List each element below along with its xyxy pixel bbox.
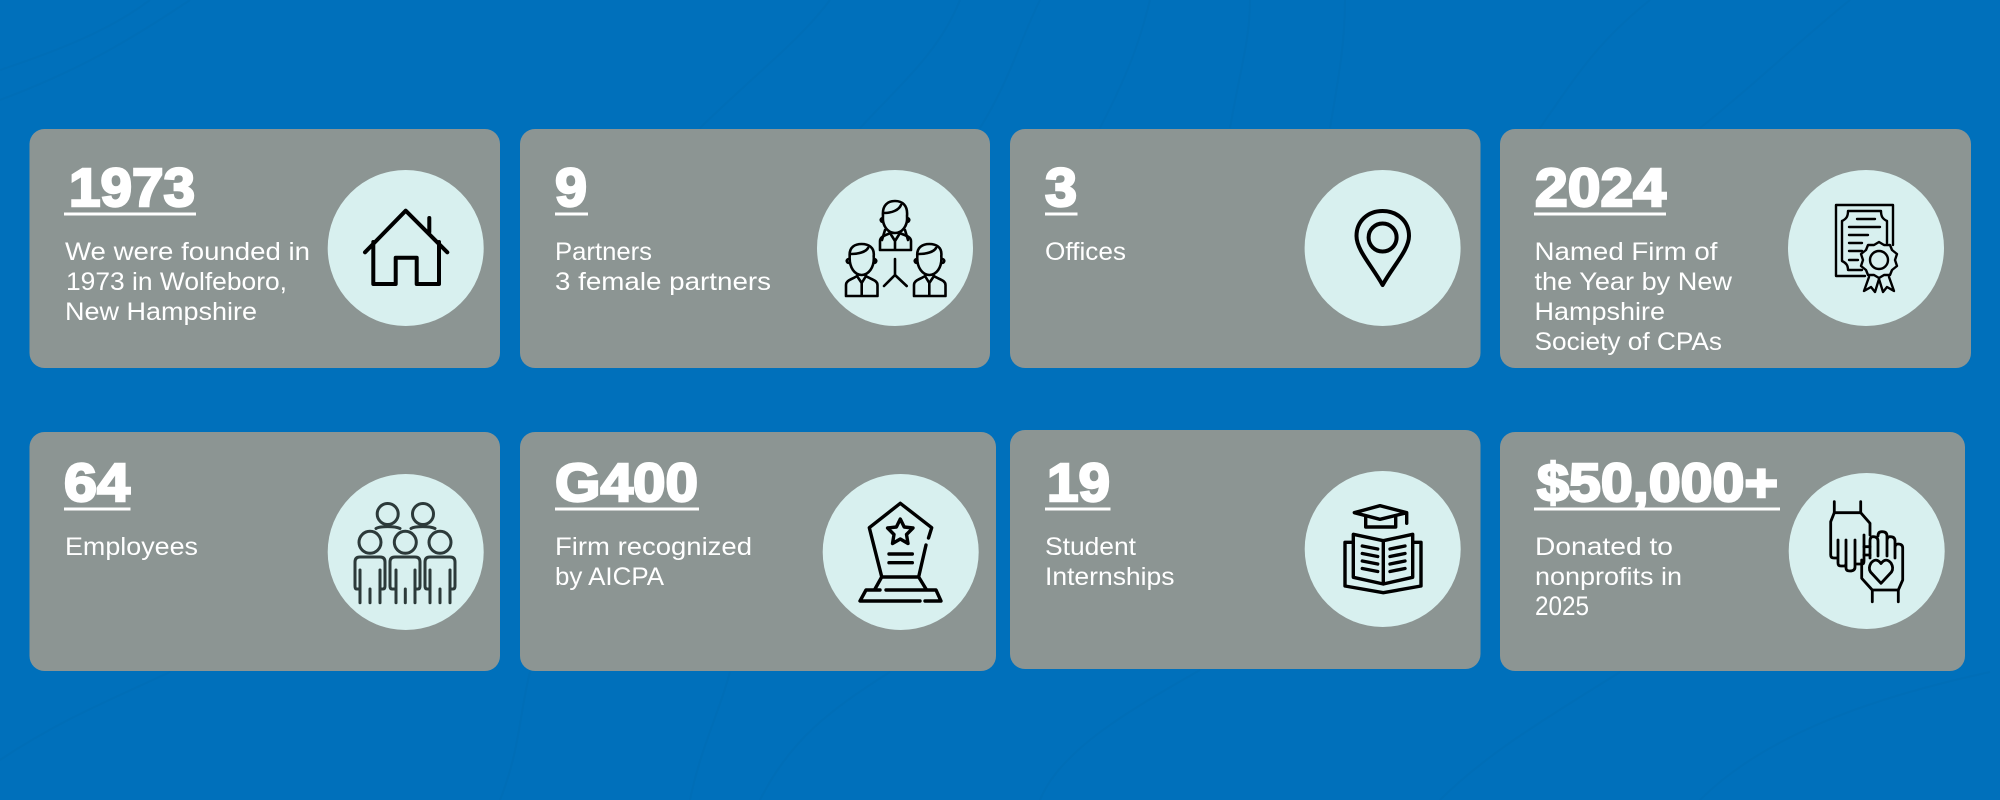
text: award description: Society of CPAs [1534, 328, 1722, 356]
panel: partners [520, 129, 990, 368]
icon: three partners [817, 170, 973, 326]
text: internships description: Internships [1045, 563, 1174, 591]
panel: G400 [520, 432, 996, 671]
heading: 64: 64 [64, 453, 130, 513]
text: award description: Named Firm of [1534, 238, 1718, 266]
text: partners description: Partners [555, 238, 652, 266]
heading: 2024: 2024 [1535, 158, 1666, 218]
text: founding description: 1973 in Wolfeboro, [66, 268, 287, 296]
panel: founded 1973 [30, 129, 500, 368]
text: donations description [1535, 533, 1682, 621]
panel: employees [30, 432, 500, 671]
text: partners description: 3 female partners [555, 268, 771, 296]
text: internships description [1045, 533, 1174, 591]
icon: trophy [823, 474, 979, 630]
text: G400 description: by AICPA [555, 563, 664, 591]
text: employees description: Employees [65, 533, 198, 561]
icon: house [328, 170, 484, 326]
heading: $50,000+: $50,000+ [1537, 453, 1778, 513]
panel: firm of the year [1500, 129, 1971, 368]
text: internships description: Student [1045, 533, 1136, 561]
text: award description: the Year by New [1534, 268, 1733, 296]
icon: helping hands with heart [1789, 473, 1945, 629]
text: offices description: Offices [1045, 238, 1126, 266]
text: founding description [65, 238, 310, 326]
heading: G400: G400 [555, 453, 698, 513]
text: founding description: We were founded in [65, 238, 310, 266]
icon: book and graduation cap [1305, 471, 1461, 627]
text: partners description [555, 238, 771, 296]
heading: 19: 19 [1047, 453, 1110, 513]
panel: internships [1010, 430, 1480, 669]
text: donations description: nonprofits in [1535, 563, 1682, 591]
text: award description: Hampshire [1534, 298, 1665, 326]
text: G400 description: Firm recognized [555, 533, 752, 561]
icon: certificate [1788, 170, 1944, 326]
text: award description [1534, 238, 1733, 356]
icon: group of people [328, 474, 484, 630]
panel: donations [1500, 432, 1965, 671]
heading: 9: 9 [555, 158, 587, 218]
icon: location pin [1305, 170, 1461, 326]
text: founding description: New Hampshire [65, 298, 257, 326]
text: donations description: 2025 [1535, 591, 1589, 621]
heading: 1973: 1973 [69, 158, 195, 218]
panel: offices [1010, 129, 1480, 368]
text: donations description: Donated to [1535, 533, 1673, 561]
text: G400 description [555, 533, 752, 591]
heading: 3: 3 [1045, 158, 1077, 218]
